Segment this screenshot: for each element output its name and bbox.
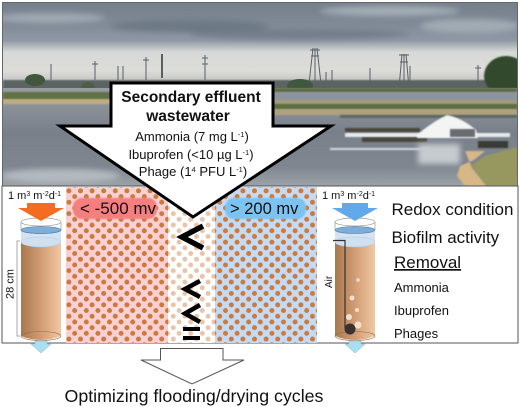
arrow concentrations: ) bbox=[249, 147, 254, 162]
panel: transition dotted zone bbox=[168, 187, 215, 343]
flow rate label: 1 m bbox=[322, 190, 340, 202]
arrow concentrations: ) bbox=[243, 164, 247, 179]
arrow concentrations: ) bbox=[244, 129, 249, 144]
removal heading: Removal bbox=[394, 253, 461, 272]
bubbles bbox=[346, 278, 362, 328]
bottom panel background bbox=[2, 186, 518, 343]
arrow heading: Secondary effluent bbox=[121, 89, 261, 106]
arrow concentrations: -1 bbox=[236, 165, 243, 174]
air label: Air bbox=[324, 275, 335, 288]
ibuprofen: Ibuprofen bbox=[394, 303, 449, 318]
flow rate label: -1 bbox=[369, 191, 375, 198]
arrow heading: wastewater bbox=[145, 108, 230, 125]
panel: anaerobic dotted zone bbox=[66, 187, 168, 343]
inflow arrow orange bbox=[18, 203, 64, 221]
label: low redox: < -500 mv bbox=[80, 199, 157, 218]
redox label: Redox condition bbox=[392, 200, 513, 219]
flow rate label: d bbox=[363, 190, 369, 202]
air stone bbox=[344, 324, 356, 334]
right column: aerated bbox=[322, 190, 378, 353]
flow rate label: 1 m bbox=[8, 190, 26, 202]
comparison symbols bbox=[182, 226, 203, 338]
arrow concentrations: Phage (1 bbox=[139, 164, 247, 179]
flow rate label: 3 bbox=[340, 191, 344, 198]
flow rate label: 3 bbox=[26, 191, 30, 198]
outflow arrow bbox=[345, 341, 365, 353]
power pylons bbox=[50, 48, 481, 81]
output arrow bbox=[141, 348, 244, 384]
biofilm label: Biofilm activity bbox=[392, 228, 500, 247]
flow rate label: -2 bbox=[356, 191, 363, 198]
column body bbox=[335, 242, 375, 340]
panel: aerobic dotted zone bbox=[215, 187, 317, 343]
far water and banks bbox=[3, 92, 113, 100]
arrow concentrations: -1 bbox=[238, 130, 244, 139]
flow rate label: m bbox=[344, 190, 356, 202]
column body bbox=[21, 242, 61, 340]
inflow arrow blue bbox=[332, 203, 378, 221]
phages: Phages bbox=[394, 326, 439, 341]
conclusion text: Optimizing flooding/drying cycles bbox=[64, 386, 324, 406]
arrow concentrations: -1 bbox=[243, 148, 249, 157]
arrow concentrations: 4 bbox=[192, 165, 196, 174]
outflow arrow bbox=[31, 341, 51, 353]
arrow concentrations: PFU L bbox=[196, 164, 236, 179]
left column: flooding bbox=[4, 190, 64, 353]
photo: wetland landscape bbox=[0, 2, 520, 186]
rock mound and fountain bbox=[345, 128, 420, 132]
air tube bbox=[333, 240, 345, 328]
list: measured responses bbox=[392, 200, 513, 341]
flow rate label: -2 bbox=[42, 191, 49, 198]
flow rate label: -1 bbox=[55, 191, 61, 198]
main arrow: secondary effluent bbox=[60, 83, 331, 217]
flow rate label: d bbox=[49, 190, 55, 202]
arrow concentrations: Ammonia (7 mg L bbox=[135, 129, 249, 144]
flow rate label: m bbox=[30, 190, 42, 202]
arrow concentrations: Ibuprofen (<10 µg L bbox=[128, 147, 254, 162]
label: high redox: > 200 mv bbox=[230, 200, 299, 218]
height bracket bbox=[17, 241, 20, 336]
ammonia: Ammonia bbox=[394, 280, 450, 295]
height label: 28 cm bbox=[4, 269, 16, 299]
